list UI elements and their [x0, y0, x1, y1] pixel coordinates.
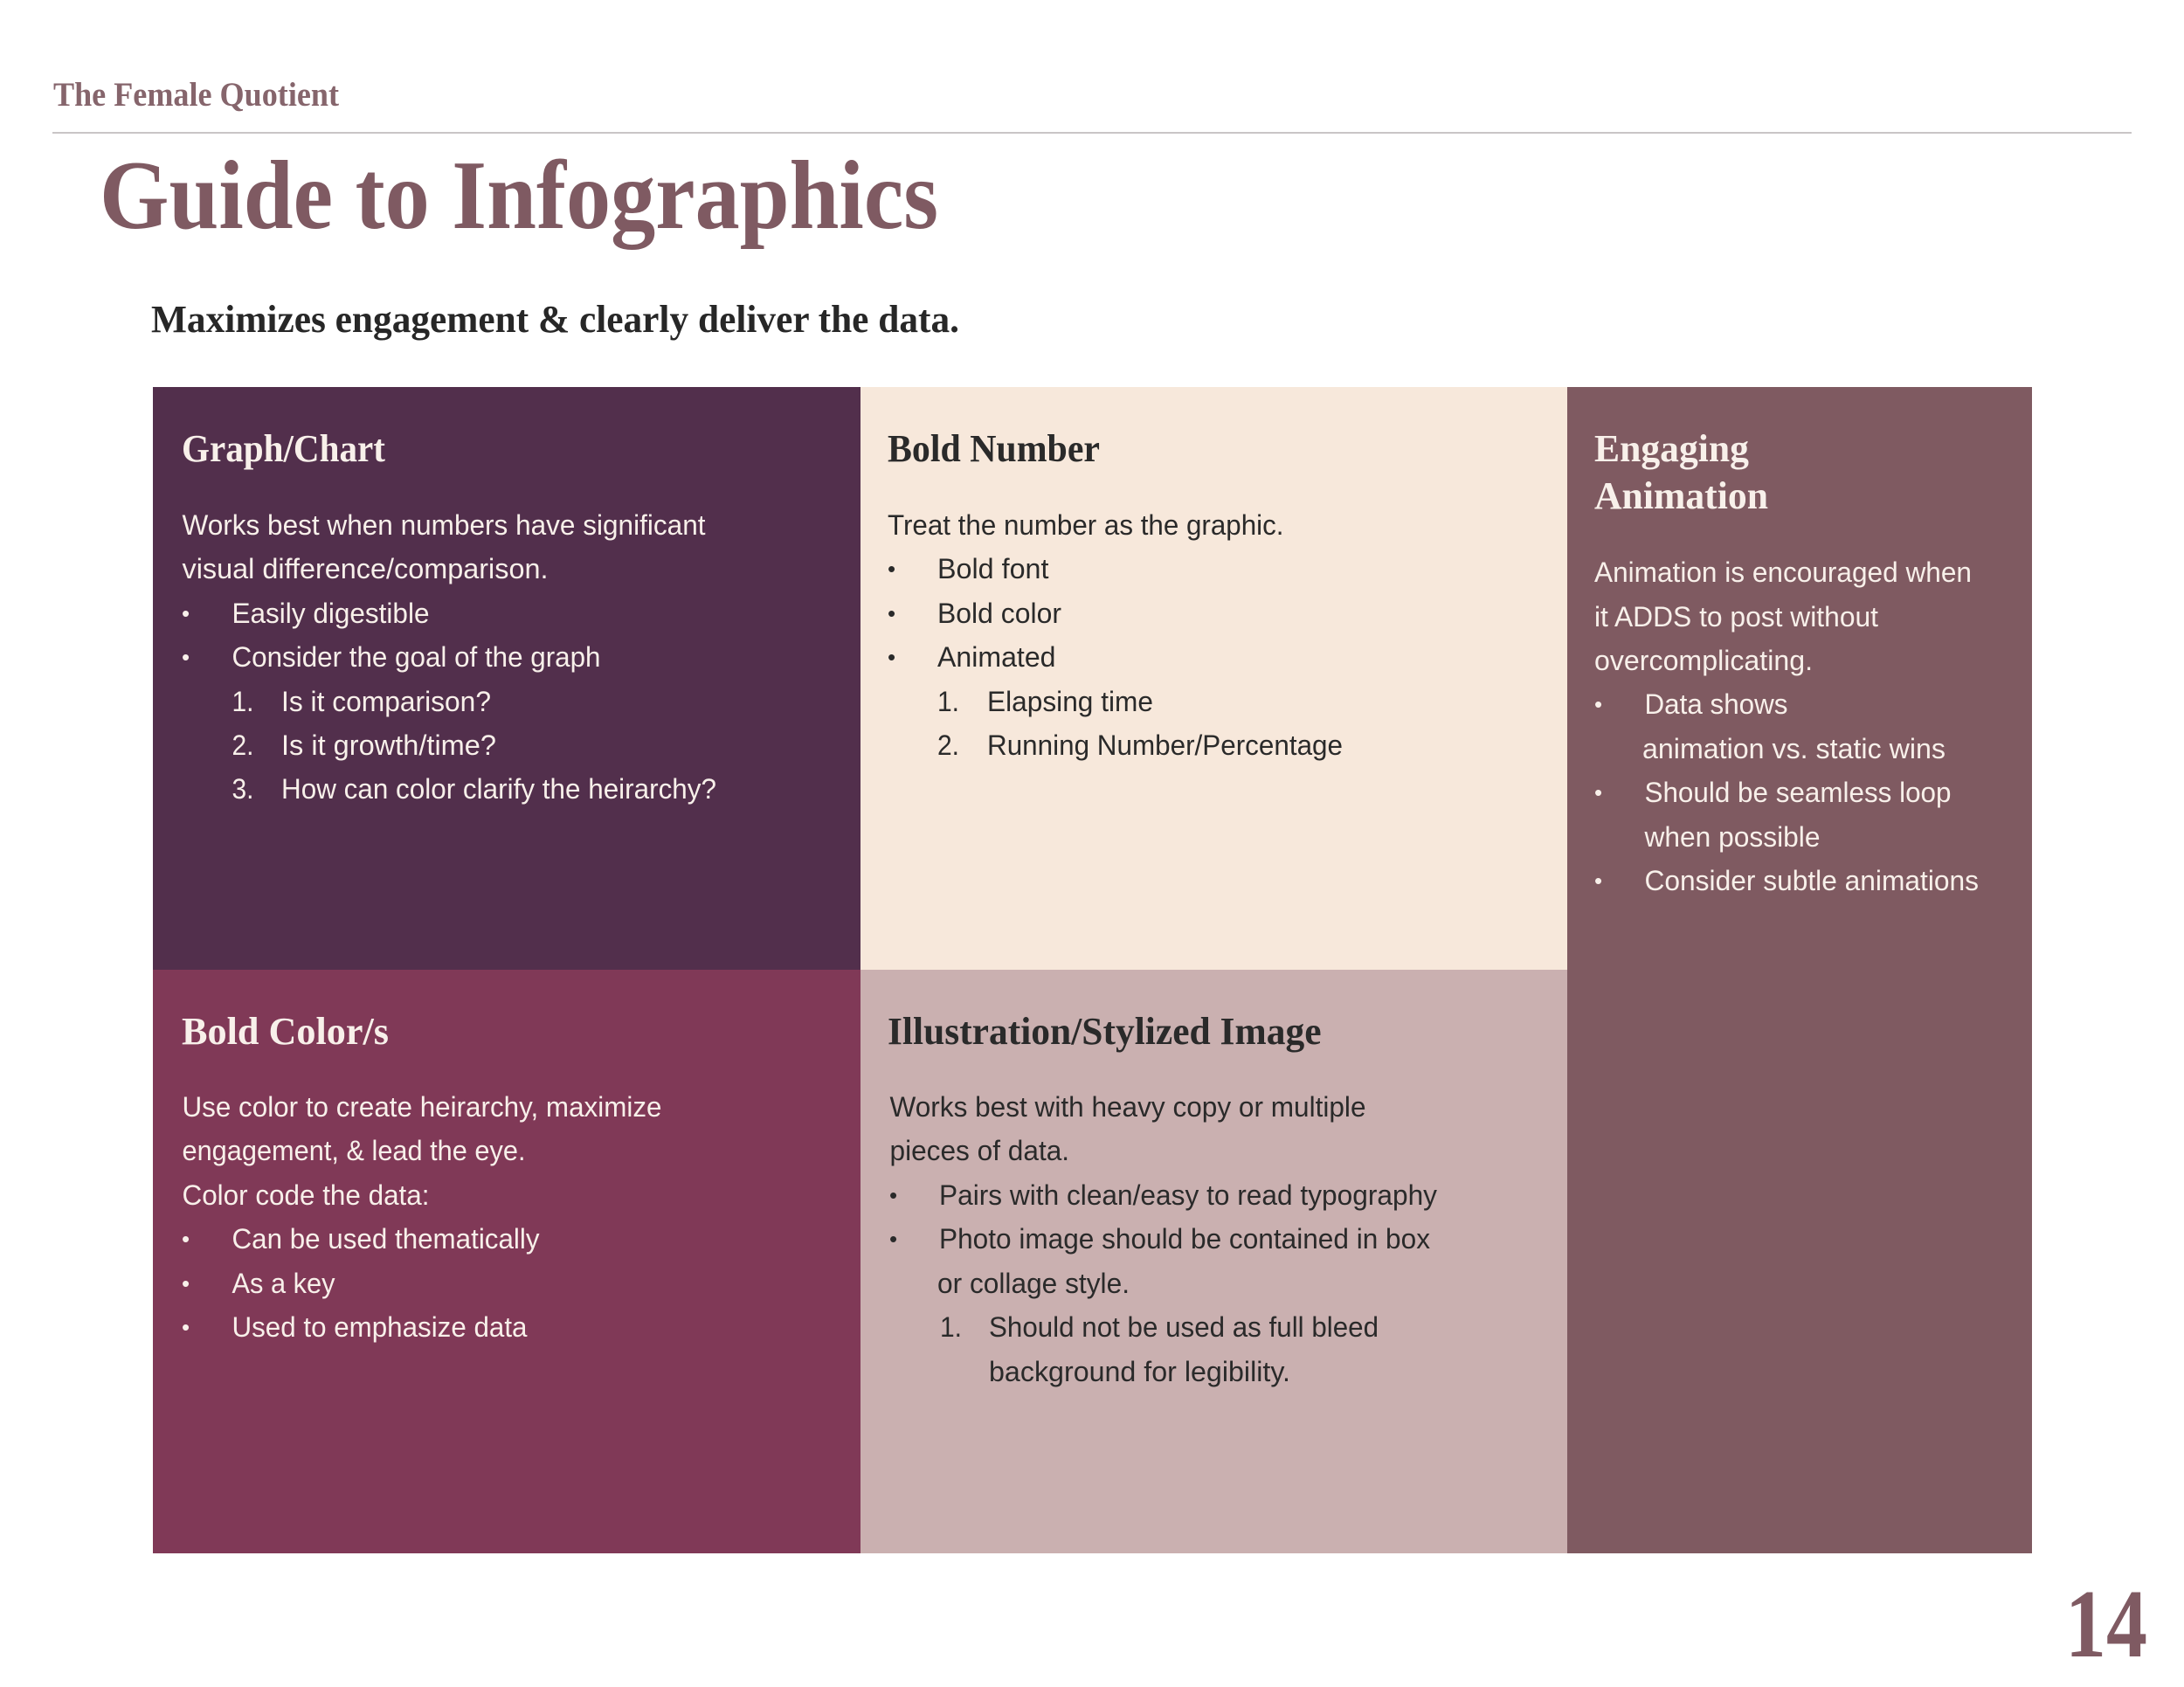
- panel: Bold Color/s: [153, 970, 860, 1553]
- subtitle: Maximizes engagement & clearly deliver the data.: [151, 298, 959, 341]
- text: Bold Number body: Animated: [937, 641, 1055, 673]
- text: Illustration/Stylized Image body: pieces of data.: [889, 1135, 1069, 1166]
- text: Engaging Animation body: when possible: [1644, 821, 1821, 853]
- text: Illustration/Stylized Image body: Pairs with clean/easy to read typography: [939, 1179, 1438, 1211]
- text: Graph/Chart body: •: [182, 644, 190, 670]
- text: Bold Number body: Running Number/Percentage: [987, 729, 1343, 761]
- text: Engaging Animation body: Should be seamless loop: [1644, 777, 1952, 808]
- text: Graph/Chart body: Is it comparison?: [281, 686, 491, 717]
- text: Bold Number body: •: [888, 600, 895, 626]
- text: Bold Color/s body: •: [182, 1314, 190, 1340]
- text: Bold Number body: •: [888, 556, 895, 582]
- text: Illustration/Stylized Image body: or collage style.: [937, 1268, 1130, 1299]
- text: Bold Color/s body: Use color to create heirarchy, maximize: [182, 1091, 662, 1123]
- text: Graph/Chart body: •: [182, 600, 190, 626]
- text: Graph/Chart body: 2.: [232, 729, 253, 761]
- text: Bold Color/s body: engagement, & lead the eye.: [182, 1135, 526, 1166]
- text: Engaging Animation body: Data shows: [1644, 688, 1787, 720]
- text: Illustration/Stylized Image body: [889, 1091, 1438, 1387]
- text: Bold Color/s body: [182, 1091, 662, 1343]
- text: Illustration/Stylized Image body: background for legibility.: [989, 1356, 1290, 1387]
- title: Guide to Infographics: [100, 142, 938, 250]
- text: Illustration/Stylized Image body: 1.: [940, 1311, 962, 1343]
- heading: Graph/Chart: Graph/Chart: [182, 427, 385, 470]
- text: Engaging Animation body: •: [1594, 868, 1602, 894]
- text: Graph/Chart body: How can color clarify the heirarchy?: [281, 773, 716, 805]
- text: Bold Number body: Bold color: [937, 598, 1061, 629]
- text: Engaging Animation body: •: [1594, 691, 1602, 717]
- text: Bold Color/s body: •: [182, 1270, 190, 1296]
- panel: Illustration/Stylized Image: [860, 970, 1567, 1553]
- text: Bold Color/s body: •: [182, 1226, 190, 1252]
- text: Bold Number body: 2.: [937, 729, 959, 761]
- text: Engaging Animation body: [1594, 557, 1979, 896]
- brand name: The Female Quotient: [53, 76, 339, 114]
- text: Graph/Chart body: Works best when numbers have significant: [182, 509, 706, 541]
- panel: Engaging Animation: [1567, 387, 2032, 1553]
- text: Graph/Chart body: Consider the goal of the graph: [232, 641, 601, 673]
- text: Bold Color/s body: Used to emphasize data: [232, 1311, 528, 1343]
- heading: Engaging Animation: Animation: [1594, 474, 1768, 517]
- text: Illustration/Stylized Image body: Works best with heavy copy or multiple: [889, 1091, 1366, 1123]
- page number: 14: [2065, 1571, 2147, 1678]
- text: Engaging Animation body: •: [1594, 779, 1602, 805]
- text: Graph/Chart body: Is it growth/time?: [281, 729, 496, 761]
- text: Illustration/Stylized Image body: •: [889, 1226, 897, 1252]
- text: Graph/Chart body: visual difference/comparison.: [182, 553, 549, 584]
- text: Graph/Chart body: 3.: [232, 773, 253, 805]
- text: Graph/Chart body: 1.: [232, 686, 253, 717]
- text: Bold Number body: Elapsing time: [987, 686, 1153, 717]
- heading: Bold Number: Bold Number: [888, 427, 1100, 470]
- text: Engaging Animation body: it ADDS to post without: [1594, 601, 1878, 633]
- text: Bold Color/s body: Color code the data:: [182, 1179, 430, 1211]
- text: Graph/Chart body: [182, 509, 716, 805]
- text: Bold Number body: •: [888, 644, 895, 670]
- text: Bold Number body: Treat the number as the graphic.: [888, 509, 1284, 541]
- text: Illustration/Stylized Image body: Photo image should be contained in box: [939, 1223, 1430, 1255]
- heading: Engaging Animation: Engaging: [1594, 427, 1749, 470]
- text: Engaging Animation body: Animation is encouraged when: [1594, 557, 1972, 588]
- panel: Bold Number: [860, 387, 1567, 970]
- text: Bold Color/s body: Can be used thematically: [232, 1223, 540, 1255]
- text: Engaging Animation body: Consider subtle animations: [1644, 865, 1979, 896]
- panel: Graph/Chart: [153, 387, 860, 970]
- text: Bold Number body: Bold font: [937, 553, 1048, 584]
- text: Graph/Chart body: Easily digestible: [232, 598, 430, 629]
- text: Bold Color/s body: As a key: [232, 1268, 335, 1299]
- text: Bold Number body: [888, 509, 1343, 761]
- text: Engaging Animation body: overcomplicating.: [1594, 645, 1813, 676]
- text: Illustration/Stylized Image body: •: [889, 1182, 897, 1208]
- heading: Engaging Animation: [1594, 427, 1768, 517]
- text: Illustration/Stylized Image body: Should not be used as full bleed: [989, 1311, 1379, 1343]
- text: Engaging Animation body: animation vs. static wins: [1642, 733, 1946, 764]
- heading: Bold Color/s: Bold Color/s: [182, 1010, 389, 1053]
- heading: Illustration/Stylized Image: Illustration/Stylized Image: [888, 1010, 1321, 1053]
- text: Bold Number body: 1.: [937, 686, 959, 717]
